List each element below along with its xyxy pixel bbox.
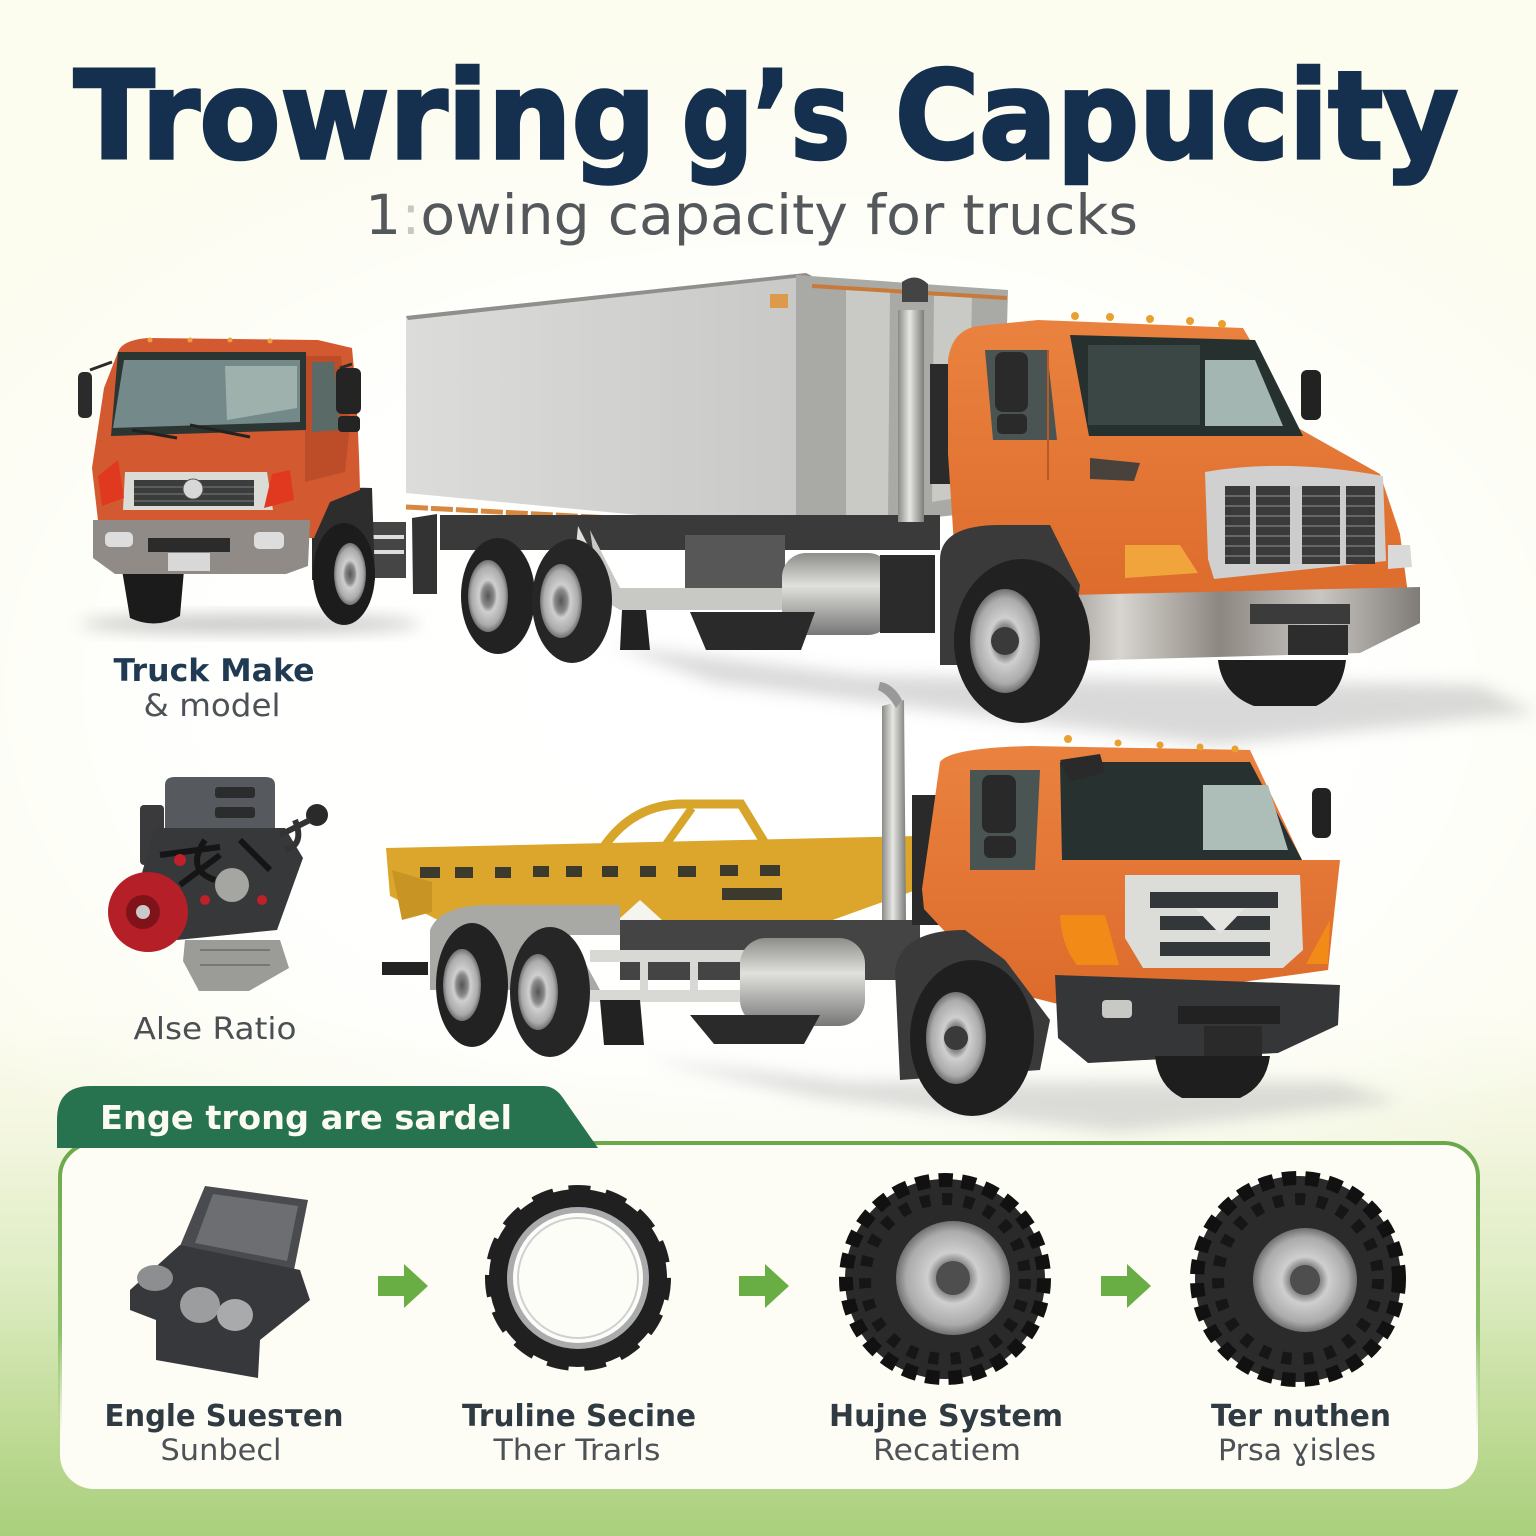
label 4 [1211, 1399, 1391, 1467]
icon: tire [845, 1179, 1045, 1379]
label 3: Hujne System [829, 1399, 1063, 1434]
label 4: Prsa ɣisles [1218, 1433, 1376, 1467]
label 4: Ter nuthen [1211, 1399, 1391, 1434]
label 2: Ther Trarls [492, 1433, 660, 1467]
caption: truck make and model: Truck Make [114, 653, 314, 689]
title end: Capucity [895, 46, 1458, 187]
caption: truck make and model: & model [144, 688, 280, 724]
title middle: g’s [682, 46, 850, 187]
icon: gear ring wheel [492, 1192, 664, 1364]
caption: axle ratio: Alse Ratio [134, 1012, 296, 1047]
title [74, 46, 1458, 187]
title: Trowring [74, 46, 656, 187]
icon: tire 2 [1195, 1176, 1401, 1382]
caption: truck make and model [114, 653, 314, 724]
label 3 [829, 1399, 1063, 1467]
truck: orange box truck [406, 273, 1536, 745]
panel tab [57, 1086, 598, 1148]
label 1: Sunbecl [160, 1433, 282, 1467]
arrow 2 [739, 1264, 789, 1308]
label 2 [462, 1399, 696, 1467]
label 3: Recatiem [873, 1433, 1021, 1467]
label 2: Truline Secine [462, 1399, 696, 1434]
icon: engine [108, 777, 328, 991]
truck: flatbed [382, 682, 1400, 1132]
arrow 3 [1101, 1264, 1151, 1308]
panel: engine parts [57, 1086, 1478, 1489]
label 1: Engle Suesτen [104, 1399, 344, 1434]
icon: engine mount box [130, 1186, 310, 1378]
truck: small red front cab [78, 338, 420, 633]
subtitle: 1:owing capacity for trucks [365, 183, 1138, 247]
label 1 [104, 1399, 344, 1467]
arrow 1 [378, 1264, 428, 1308]
panel heading: Enge trong are sardel [100, 1098, 512, 1137]
